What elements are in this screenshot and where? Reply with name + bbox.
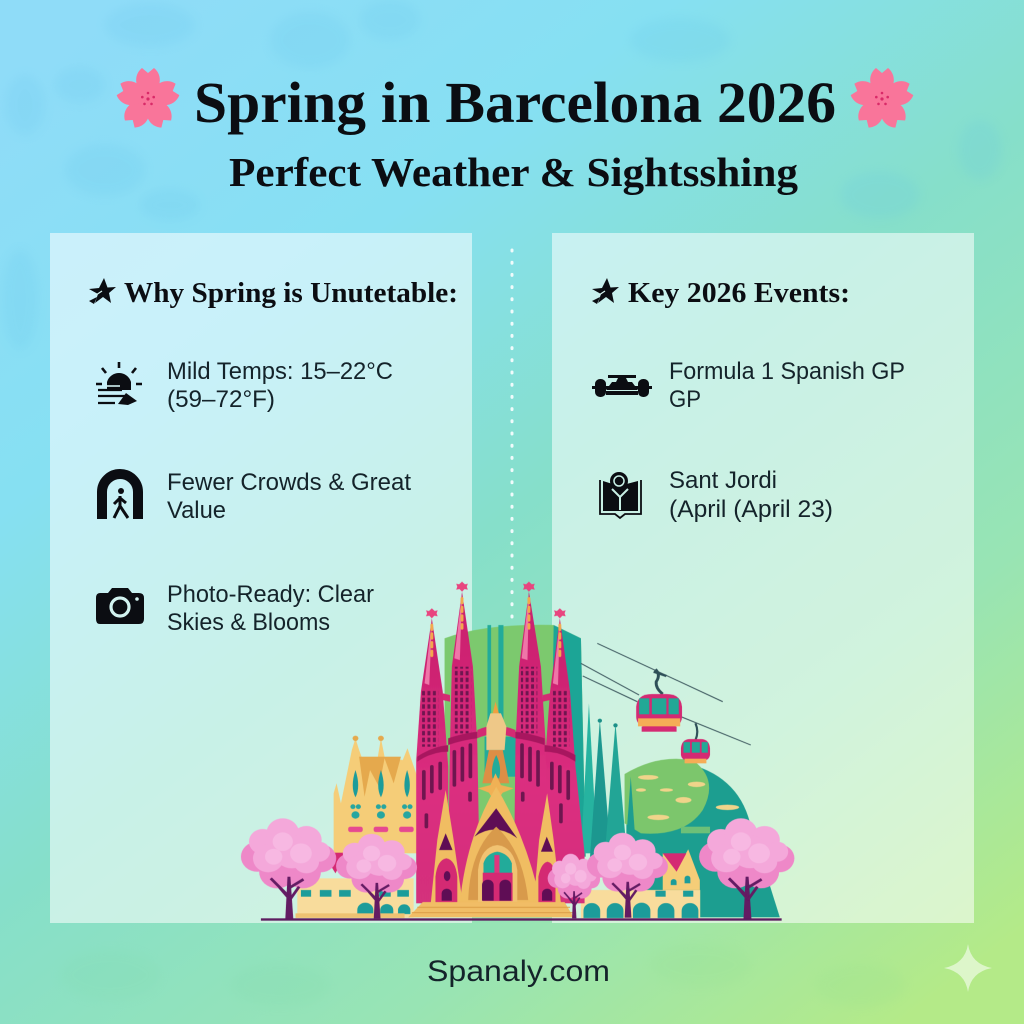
heading: why spring: Why Spring is Unutetable: [124,277,458,309]
side pinnacles [431,790,561,903]
icon: arch with walker [102,474,138,519]
panel: why spring [50,233,472,923]
arcade left [297,853,414,918]
inner towers [447,592,480,903]
cherry trees [241,818,794,919]
dotted divider [510,250,514,622]
footer: website: Spanaly.com [427,955,610,988]
conifers [581,703,635,857]
cable car: large [636,669,682,732]
tree 4 [587,833,668,918]
right panel content [592,277,905,523]
central spire [478,702,514,803]
panel: key events [552,233,974,923]
outer towers [416,618,448,903]
text: fewer crowds: Fewer Crowds & Great [167,469,411,496]
tree 3 [548,854,600,918]
cable lines [581,643,751,745]
icon: right cherry blossom [849,68,915,131]
connecting bands [477,726,515,738]
text: fewer crowds: Value [167,497,226,524]
ground line [261,918,782,921]
text: mild temps: Mild Temps: 15–22°C [167,358,393,385]
window grids [422,690,438,747]
tree 1 [241,818,336,919]
steps [295,902,574,918]
title text: Spring in Barcelona 2026 [194,70,836,135]
icon: star heading right [592,278,619,304]
gothic building left [334,736,417,853]
text: photo ready: Skies & Blooms [167,609,330,636]
spire highlights [425,593,560,685]
back tower [445,625,586,857]
text: photo ready: Photo-Ready: Clear [167,581,374,608]
cable car: small [681,723,710,763]
icon: formula 1 car [592,375,652,397]
hill clouds [636,775,739,820]
subtitle: Perfect Weather & Sightsshing [229,149,799,195]
icon: sun and breeze [96,362,142,405]
tree 5 [699,818,794,919]
hill [625,759,780,917]
text: mild temps: (59–72°F) [167,386,275,413]
icon: book and rose [600,472,641,518]
tree 2 [336,834,417,919]
text: sant jordi: (April (April 23) [669,496,833,523]
arcade right [581,849,700,918]
text: sant jordi: Sant Jordi [669,467,777,494]
finials [426,582,566,657]
basilica towers [416,582,585,903]
icon: star heading left [89,278,116,304]
illustration: Barcelona skyline [241,582,794,921]
left panel content [89,277,458,636]
lancet windows [422,743,570,828]
heading: key events: Key 2026 Events: [628,277,850,309]
portal [460,787,541,903]
icon: sparkle [944,944,992,992]
text: formula 1: Formula 1 Spanish GP [669,358,905,385]
icon: camera [96,588,144,624]
text: formula 1: GP [669,386,701,413]
title [115,68,915,135]
icon: left cherry blossom [115,68,181,131]
